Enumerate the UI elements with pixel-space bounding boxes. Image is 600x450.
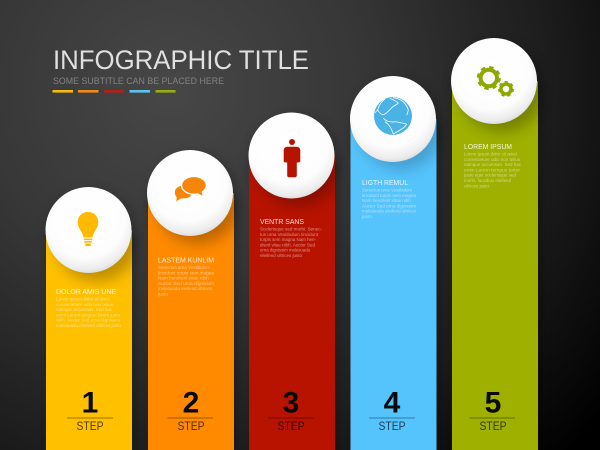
body text: eleifend ultrices justo xyxy=(260,253,302,259)
heading: LIGTH REMUL xyxy=(362,178,408,187)
bar shadow xyxy=(354,125,440,450)
body text: ultrices justo xyxy=(464,183,489,189)
body text: tus urna Vestibulum tincidunt xyxy=(260,232,319,238)
body text: Auctor Sed urna dignissim xyxy=(158,281,214,287)
body text: consectetuer odio non tellus xyxy=(56,302,114,308)
heading: DOLOR AMIS UNE xyxy=(56,287,116,296)
body text: justo eget scelerisque sed xyxy=(463,173,516,179)
body text: tincidunt turpis sem magna xyxy=(362,193,416,199)
body text xyxy=(463,152,522,189)
body text: tincidunt turpis sem magna xyxy=(158,270,214,276)
step label: STEP xyxy=(76,421,104,433)
step label: STEP xyxy=(378,421,406,433)
icon: globe xyxy=(374,97,412,135)
number: 1 xyxy=(82,386,98,420)
bar shadow xyxy=(50,236,136,450)
bar xyxy=(148,193,234,450)
panel: step 1 xyxy=(46,187,139,450)
panel: step 2 xyxy=(147,150,240,450)
panel: step 4 xyxy=(350,76,443,450)
ball shadow xyxy=(49,230,132,288)
bar xyxy=(452,81,538,450)
body text: turpis sem magna Nam hen- xyxy=(260,237,316,243)
body text: consectetuer odio non tellus xyxy=(464,157,521,163)
body text: nibh. Auctor Sed urna dignissim xyxy=(56,318,120,324)
heading: LOREM IPSUM xyxy=(464,142,512,151)
body text: morbi, faucibus eleifend xyxy=(464,178,511,184)
body text xyxy=(157,265,214,298)
ball shadow xyxy=(150,193,234,251)
bar shadow xyxy=(152,199,238,450)
ball shadow on background xyxy=(49,193,135,279)
body text: natoque accumsan. Sed hac xyxy=(464,162,522,168)
body text: justo xyxy=(157,292,168,298)
body text: Nam hendrerit vitae nibh. xyxy=(362,198,412,204)
icon: person xyxy=(284,139,300,177)
body text: Senectus urna Vestibulum xyxy=(362,188,412,194)
icon: speech bubbles xyxy=(175,176,206,201)
body text: malesuada eleifend ultrices justo xyxy=(56,323,121,329)
step label: STEP xyxy=(278,421,305,433)
bar xyxy=(249,155,335,450)
step label: STEP xyxy=(178,421,205,433)
body text: drerit vitae nibh. Auctor Sed xyxy=(260,242,315,248)
ball xyxy=(248,112,334,198)
number: 3 xyxy=(283,386,299,420)
body text: malesuada eleifend ultrices xyxy=(158,286,213,292)
bar xyxy=(350,119,436,450)
body text: malesuada eleifend ultrices xyxy=(362,209,417,215)
ball shadow on background xyxy=(455,44,541,130)
ball shadow on background xyxy=(252,118,338,204)
bar xyxy=(46,230,132,450)
body text: Lorem ipsum dolor sit amet xyxy=(56,296,111,302)
body text: Lorem ipsum dolor sit amet xyxy=(464,152,518,158)
colour dashes xyxy=(52,90,176,93)
icon: light bulb xyxy=(78,212,98,246)
bar shadow xyxy=(456,87,542,450)
body text xyxy=(56,296,121,329)
ball xyxy=(147,150,233,236)
body text xyxy=(260,226,322,259)
ball shadow xyxy=(252,155,335,212)
ball shadow on background xyxy=(354,82,440,168)
subtitle: SOME SUBTITLE CAN BE PLACED HERE xyxy=(53,76,224,86)
panel: step 3 xyxy=(248,112,341,450)
body text: Senectus urna Vestibulum xyxy=(158,265,210,271)
body text xyxy=(361,188,417,220)
heading: LASTEM KUNLIM xyxy=(158,256,214,264)
ball shadow xyxy=(355,119,436,176)
ball xyxy=(451,38,537,124)
panel: step 5 xyxy=(451,38,544,450)
ball shadow xyxy=(456,81,538,138)
bar shadow xyxy=(253,161,339,450)
step label: STEP xyxy=(480,421,507,433)
number: 5 xyxy=(485,386,501,420)
body text: urna dignissim malesuada xyxy=(260,248,310,254)
body text: Auctor Sed urna dignissim xyxy=(362,203,416,209)
body text: Nam hendrerit vitae nibh. xyxy=(158,276,210,282)
number: 4 xyxy=(384,386,401,420)
title: INFOGRAPHIC TITLE xyxy=(53,45,309,75)
body text: enim Lorem tempus tortor xyxy=(464,167,520,173)
body text: natoque accumsan. Sed hac xyxy=(56,307,112,313)
ball xyxy=(350,76,436,162)
body text: justo xyxy=(361,214,372,220)
ball shadow on background xyxy=(151,156,237,242)
title block xyxy=(52,45,309,93)
ball xyxy=(46,187,132,273)
icon: gears xyxy=(478,67,513,96)
number: 2 xyxy=(183,386,199,420)
body text: enim Lorem tempus lorem justo xyxy=(56,312,120,318)
heading: VENTR SANS xyxy=(260,217,304,226)
body text: Scelerisque sed morbi. Senec- xyxy=(260,226,322,232)
